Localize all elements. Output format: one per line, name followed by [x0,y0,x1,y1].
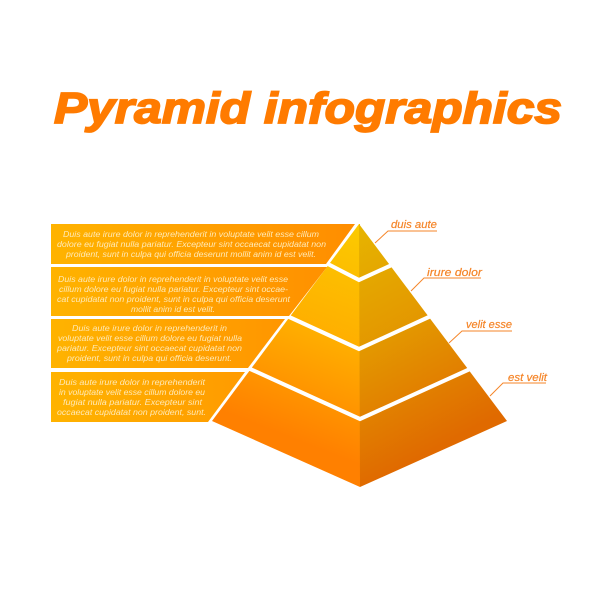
label: irure dolor [411,267,483,291]
panel: text band 1: proident, sunt in culpa qui officia deserunt mollit anim id est velit. [65,250,316,259]
pyramid [212,224,507,487]
label: duis aute: duis aute [391,219,437,231]
panel: text band 2: Duis aute irure dolor in reprehenderit in voluptate velit esse [58,275,289,284]
panel: text band 3: voluptate velit esse cillum dolore eu fugiat nulla [58,334,243,343]
panel: text band 3: pariatur. Excepteur sint occaecat cupidatat non [56,344,243,353]
label: velit esse [449,319,512,343]
panel: text band 4 [51,372,245,422]
panel: text band 2: mollit anim id est velit. [131,305,215,314]
panel: text band 3: proident, sunt in culpa qui officia deserunt. [66,354,232,363]
label: est velit: est velit [508,372,548,384]
panel: text band 3: Duis aute irure dolor in reprehenderit in [72,324,228,333]
label: est velit [490,372,548,396]
panel: text band 4: occaecat cupidatat non proident, sunt. [57,408,206,417]
title: Pyramid infographics [54,84,562,133]
panel: text band 2 [51,267,327,316]
panel: text band 3 [51,319,285,368]
label: irure dolor: irure dolor [427,267,483,279]
pyramid left face [212,224,360,487]
label: duis aute [375,219,437,243]
label: velit esse: velit esse [466,319,512,331]
panel: text band 4: Duis aute irure dolor in reprehenderit [59,378,206,387]
panel: text band 2: cillum dolore eu fugiat nulla pariatur. Excepteur sint occae- [59,285,288,294]
pyramid right face [359,224,507,487]
panel: text band 1: Duis aute irure dolor in reprehenderit in voluptate velit esse cillum [63,230,319,239]
panel: text band 1: dolore eu fugiat nulla pariatur. Excepteur sint occaecat cupidatat non [57,240,327,249]
panel: text band 1 [51,224,355,264]
panel: text band 4: fugiat nulla pariatur. Excepteur sint [63,398,203,407]
panel: text band 2: cat cupidatat non proident, sunt in culpa qui officia deserunt [57,295,291,304]
panel: text band 4: in voluptate velit esse cillum dolore eu [59,388,206,397]
